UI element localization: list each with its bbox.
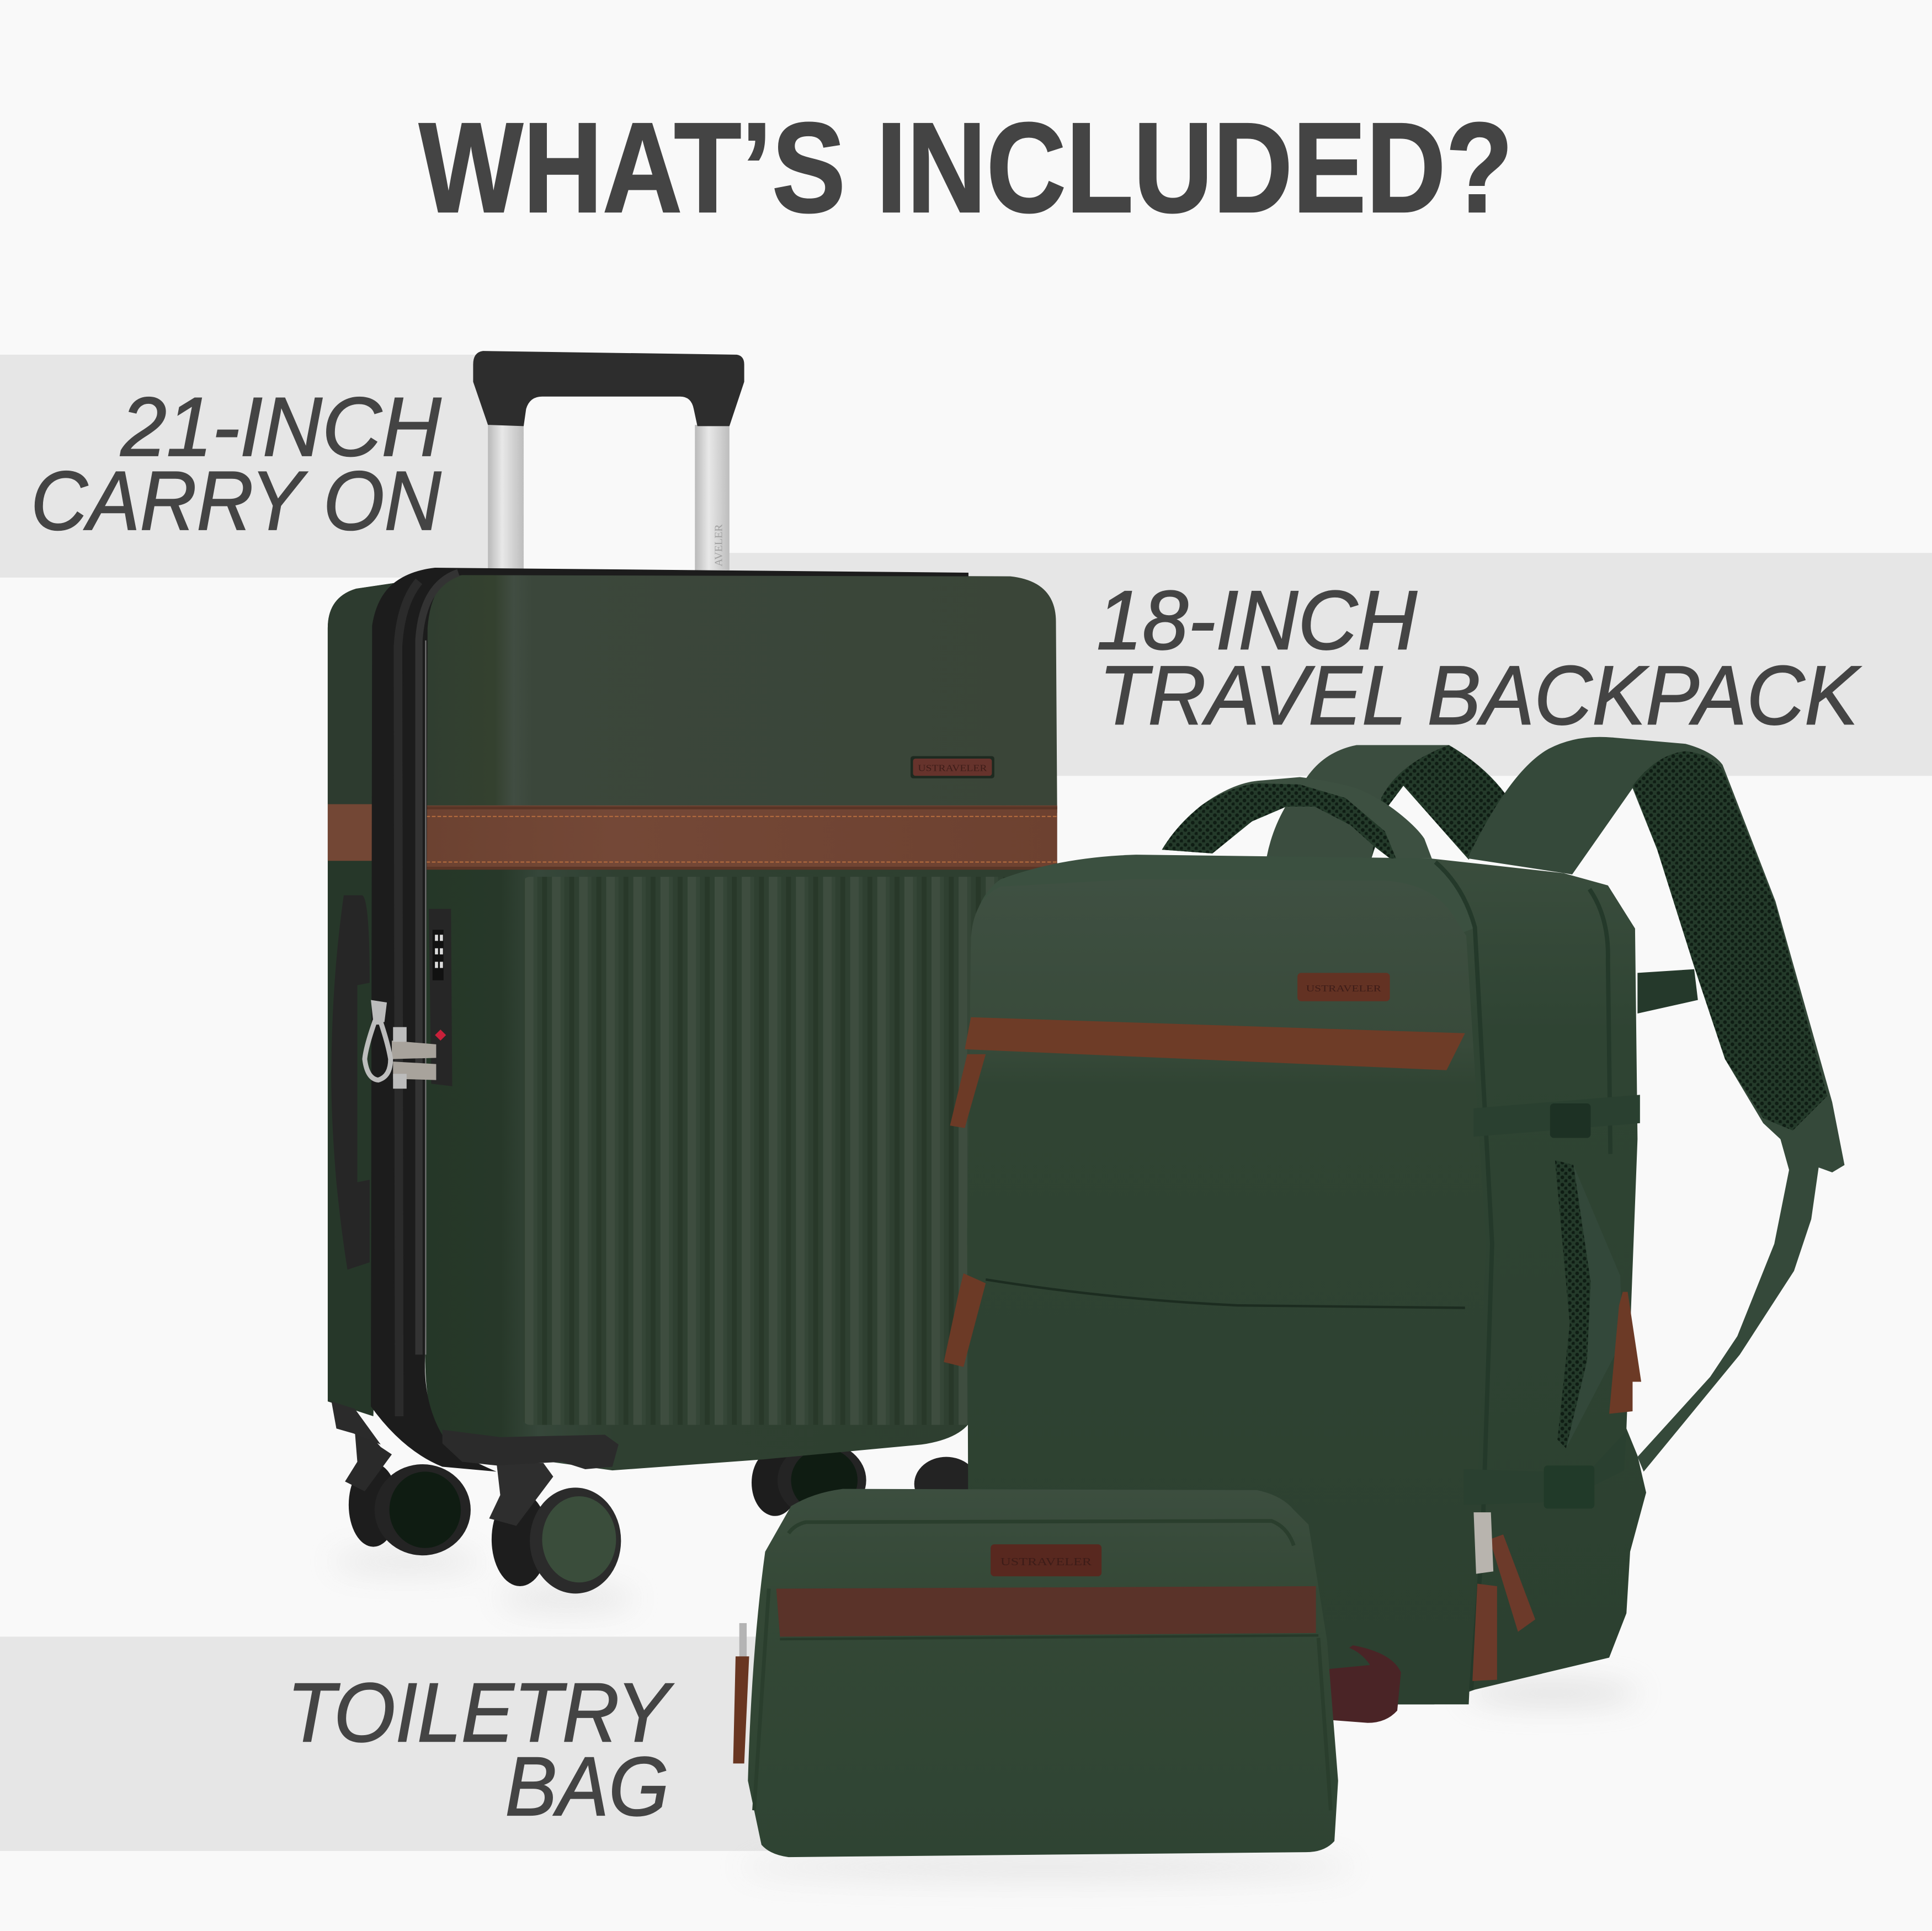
side carry handle	[331, 895, 370, 1269]
label: 21-inch carry on: 21-INCH	[120, 381, 441, 474]
strap mesh padding	[1632, 751, 1827, 1130]
leather zipper trim	[965, 1017, 1465, 1070]
label: 18-inch travel backpack: TRAVEL BACKPACK	[1099, 649, 1861, 742]
zipper pull	[733, 1623, 749, 1763]
lower pocket line	[986, 1279, 1465, 1308]
rear shell upper tone	[328, 583, 398, 804]
label: 18-inch travel backpack: 18-INCH	[1097, 574, 1417, 667]
rear shell leather band	[328, 804, 375, 861]
toiletry bag	[733, 1489, 1401, 1857]
brand patch	[1297, 973, 1390, 1001]
handle grip	[473, 351, 744, 426]
title: WHAT’S INCLUDED?	[419, 97, 1513, 239]
brand patch: USTRAVELER	[1000, 1556, 1092, 1568]
pocket seam	[780, 1635, 1318, 1639]
lower ribbed shell	[425, 862, 1057, 1470]
leather strip	[776, 1586, 1316, 1637]
bottom zip pulls	[1472, 1512, 1535, 1681]
brand patch	[991, 1544, 1101, 1576]
top gusset seam	[754, 1521, 1330, 1810]
band: carry on label	[0, 355, 491, 578]
side handle	[1555, 1160, 1623, 1448]
upper buckle strap	[1473, 1095, 1640, 1138]
front zipper pull	[944, 1273, 986, 1367]
combination lock	[429, 909, 452, 1086]
band: toiletry label	[0, 1637, 789, 1851]
label: toiletry bag: TOILETRY	[287, 1666, 674, 1759]
upper shell	[425, 574, 1057, 813]
rear shell	[328, 583, 398, 1416]
piping seam	[1435, 862, 1610, 1689]
label: 21-inch carry on	[31, 381, 441, 548]
top carry handle	[1162, 777, 1431, 858]
telescoping handle poles	[488, 425, 730, 570]
zipper pulls	[365, 1000, 436, 1089]
bag body	[748, 1489, 1338, 1857]
strap connector	[1637, 969, 1698, 1013]
zipper tab	[950, 1054, 986, 1128]
label: 21-inch carry on: CARRY ON	[31, 455, 441, 548]
band: backpack label	[727, 553, 1932, 776]
side loop handle	[1319, 1645, 1401, 1723]
floor shadows	[333, 1551, 1639, 1878]
lower buckle strap	[1464, 1431, 1626, 1508]
leather band	[427, 806, 1057, 870]
label: toiletry bag: BAG	[505, 1740, 669, 1833]
wheels	[345, 1416, 978, 1593]
brand plate: USTRAVELER	[918, 762, 987, 773]
top gusset	[971, 855, 1476, 938]
side zip tabs	[1609, 1292, 1641, 1413]
vertical ribs	[523, 877, 1010, 1425]
brand patch: USTRAVELER	[1306, 983, 1382, 994]
front panel	[967, 879, 1486, 1704]
wheel housing	[332, 1401, 619, 1469]
telescoping handle poles: AVELER	[712, 524, 725, 567]
right shoulder strap	[1467, 737, 1844, 1471]
brand plate	[911, 756, 994, 778]
suitcase: 21-inch carry on	[328, 351, 1057, 1593]
zipper	[371, 568, 968, 1471]
backpack: 18-inch travel backpack	[944, 737, 1844, 1704]
label: toiletry bag	[287, 1666, 674, 1833]
rear shoulder strap	[1266, 745, 1505, 860]
main body side panel	[1306, 858, 1646, 1704]
label: 18-inch travel backpack	[1097, 574, 1861, 742]
